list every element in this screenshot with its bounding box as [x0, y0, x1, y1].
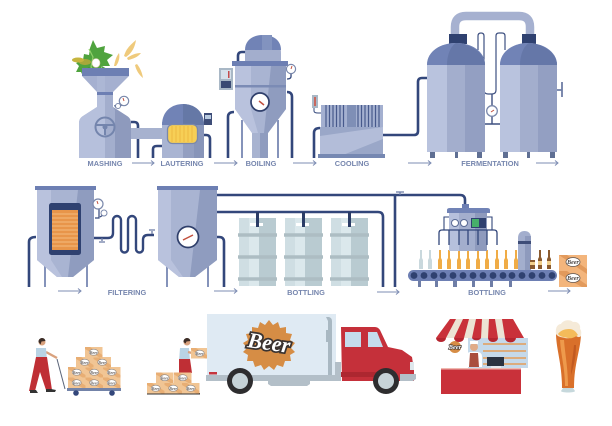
thermometer [312, 95, 318, 108]
control box [204, 113, 212, 125]
filter gauges [95, 209, 103, 218]
cab [341, 327, 414, 381]
row one labels [88, 159, 519, 168]
pallet with boxes [147, 372, 200, 394]
carried box [191, 348, 208, 358]
icon: hops leaves [72, 40, 113, 78]
top transfer pipe [455, 16, 530, 36]
left tank [427, 34, 485, 158]
cooling fins [326, 105, 379, 127]
row one labels: BOILING [246, 159, 277, 168]
machine: lautering [153, 104, 212, 158]
row two labels [108, 288, 506, 297]
pipe coil [94, 216, 155, 253]
bumper [400, 374, 416, 381]
row one labels: COOLING [335, 159, 369, 168]
row one labels: FERMENTATION [461, 159, 519, 168]
distribution pipes [217, 192, 465, 287]
connecting pipe [131, 128, 163, 139]
machine: mashing [72, 40, 143, 158]
conveyor belt [408, 270, 557, 287]
pipes [228, 112, 234, 158]
beer crate: Beer [566, 276, 579, 282]
hopper funnel [82, 68, 129, 92]
clear bottles [419, 250, 432, 269]
worker loading truck [179, 338, 208, 373]
row one labels: MASHING [88, 159, 123, 168]
pipes [314, 128, 320, 158]
mash wheel [96, 118, 114, 136]
cargo box [207, 314, 336, 375]
wheels [227, 368, 253, 394]
awning [436, 319, 524, 342]
kegs [238, 212, 369, 286]
small gauge [287, 74, 291, 79]
shelves [441, 338, 528, 368]
brown bottles [530, 250, 551, 269]
stall badge: Beer [448, 344, 462, 351]
vendor [466, 341, 482, 367]
row two labels: FILTERING [108, 288, 146, 297]
row one arrows [132, 160, 558, 166]
row two labels: BOTTLING [468, 288, 506, 297]
row two arrows [58, 288, 570, 294]
badge: beer [243, 320, 295, 370]
beer crate: Beer [566, 260, 579, 266]
outlet pipe [131, 122, 138, 158]
pipes [204, 135, 210, 158]
row one labels: LAUTERING [160, 159, 204, 168]
filled bottles [438, 250, 518, 269]
row two labels: BOTTLING [287, 288, 325, 297]
right tank [500, 34, 557, 158]
bottling line [408, 204, 557, 287]
mash tun body [79, 95, 131, 158]
beer glass [556, 320, 581, 392]
control panel [219, 68, 233, 90]
exhaust pipe [326, 317, 332, 375]
keg one [238, 212, 277, 286]
till [487, 357, 504, 366]
keg three [330, 212, 369, 286]
keg two [284, 212, 323, 286]
siphon tube [478, 33, 505, 94]
gauge [115, 103, 121, 108]
market stall [436, 319, 528, 394]
capping tower [518, 231, 531, 270]
chassis [206, 362, 341, 386]
badge: beer: Beer [245, 327, 292, 358]
machine: filter tank two [157, 186, 224, 287]
delivery truck [206, 314, 416, 394]
machine: cooling [312, 78, 427, 158]
worker pushing cart [29, 338, 65, 393]
cart with boxes [67, 347, 121, 396]
fermentation gauge [487, 106, 497, 116]
machine: filter tank [29, 186, 107, 287]
lauter window [168, 124, 198, 144]
boiling gauge [251, 93, 269, 111]
icon: wheat [114, 40, 143, 78]
beer crate [559, 255, 587, 287]
machine: fermentation [427, 16, 562, 158]
tank gauge [178, 226, 198, 248]
filter window [49, 203, 81, 255]
machine: boiling [219, 35, 296, 158]
counter [441, 368, 521, 394]
side valve [557, 82, 562, 97]
filling machine [439, 204, 497, 251]
